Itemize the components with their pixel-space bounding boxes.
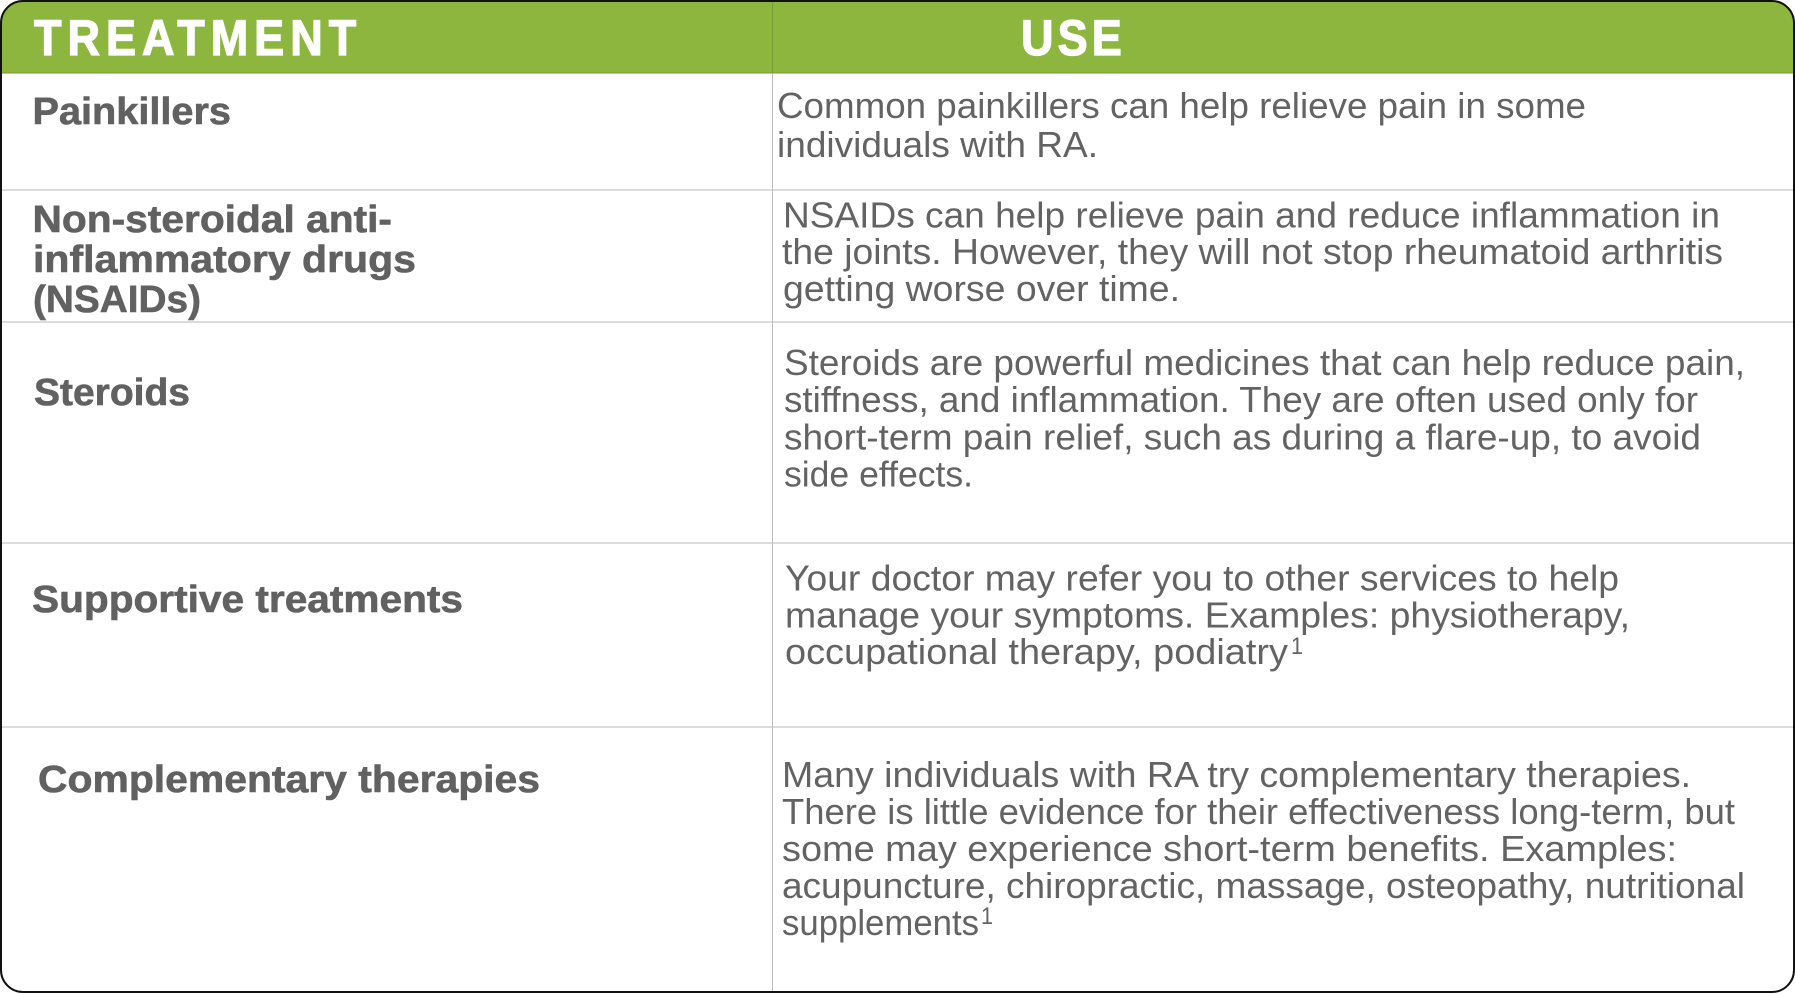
use text: complementary therapies: 1 (981, 903, 993, 930)
use text: supportive treatments: manage your symptoms. Examples: physiotherapy, (785, 594, 1630, 636)
treatment name: NSAIDs (32, 199, 416, 321)
use text: supportive treatments: 1 (1291, 633, 1303, 660)
use text: supportive treatments (785, 558, 1630, 672)
use text: NSAIDs: NSAIDs can help relieve pain and reduce inflammation in (783, 194, 1720, 236)
treatment name: complementary therapies: Complementary therapies (38, 759, 540, 801)
use text: painkillers: Common painkillers can help relieve pain in some (777, 85, 1586, 126)
treatment name: supportive treatments: Supportive treatments (32, 579, 463, 621)
use text: complementary therapies: acupuncture, chiropractic, massage, osteopathy, nutritional (782, 865, 1745, 906)
heading: use column: USE (1021, 11, 1122, 67)
use text: NSAIDs: the joints. However, they will not stop rheumatoid arthritis (782, 231, 1723, 272)
treatment name: NSAIDs: Non-steroidal anti- (32, 199, 392, 241)
row: painkillers (32, 85, 1586, 165)
use text: NSAIDs (782, 194, 1723, 309)
use text: steroids: short-term pain relief, such as during a flare-up, to avoid (784, 416, 1701, 458)
use text: painkillers: individuals with RA. (777, 124, 1098, 165)
use text: complementary therapies: There is little evidence for their effectiveness long-term, but (782, 791, 1735, 832)
heading: treatment column: TREATMENT (34, 11, 356, 67)
use text: painkillers (777, 85, 1586, 165)
use text: supportive treatments: occupational therapy, podiatry (785, 631, 1288, 672)
treatment name: NSAIDs: (NSAIDs) (33, 279, 201, 321)
row: NSAIDs (32, 194, 1723, 321)
use text: NSAIDs: getting worse over time. (783, 268, 1180, 309)
use text: supportive treatments: Your doctor may refer you to other services to help (785, 558, 1619, 598)
treatment name: painkillers: Painkillers (32, 91, 231, 133)
row: complementary therapies (38, 754, 1745, 943)
use text: complementary therapies: Many individuals with RA try complementary therapies. (782, 754, 1691, 795)
use text: complementary therapies: some may experience short-term benefits. Examples: (782, 828, 1677, 869)
use text: steroids: stiffness, and inflammation. They are often used only for (784, 379, 1698, 420)
use text: steroids: Steroids are powerful medicines that can help reduce pain, (784, 342, 1745, 383)
use text: steroids (784, 342, 1745, 494)
header band (1, 1, 1794, 73)
row: supportive treatments (32, 558, 1630, 672)
treatment name: steroids: Steroids (34, 372, 190, 414)
use text: steroids: side effects. (784, 454, 973, 494)
treatment name: NSAIDs: inflammatory drugs (33, 239, 416, 281)
use text: complementary therapies: supplements (782, 902, 979, 943)
use text: complementary therapies (782, 754, 1745, 943)
row: steroids (34, 342, 1745, 494)
